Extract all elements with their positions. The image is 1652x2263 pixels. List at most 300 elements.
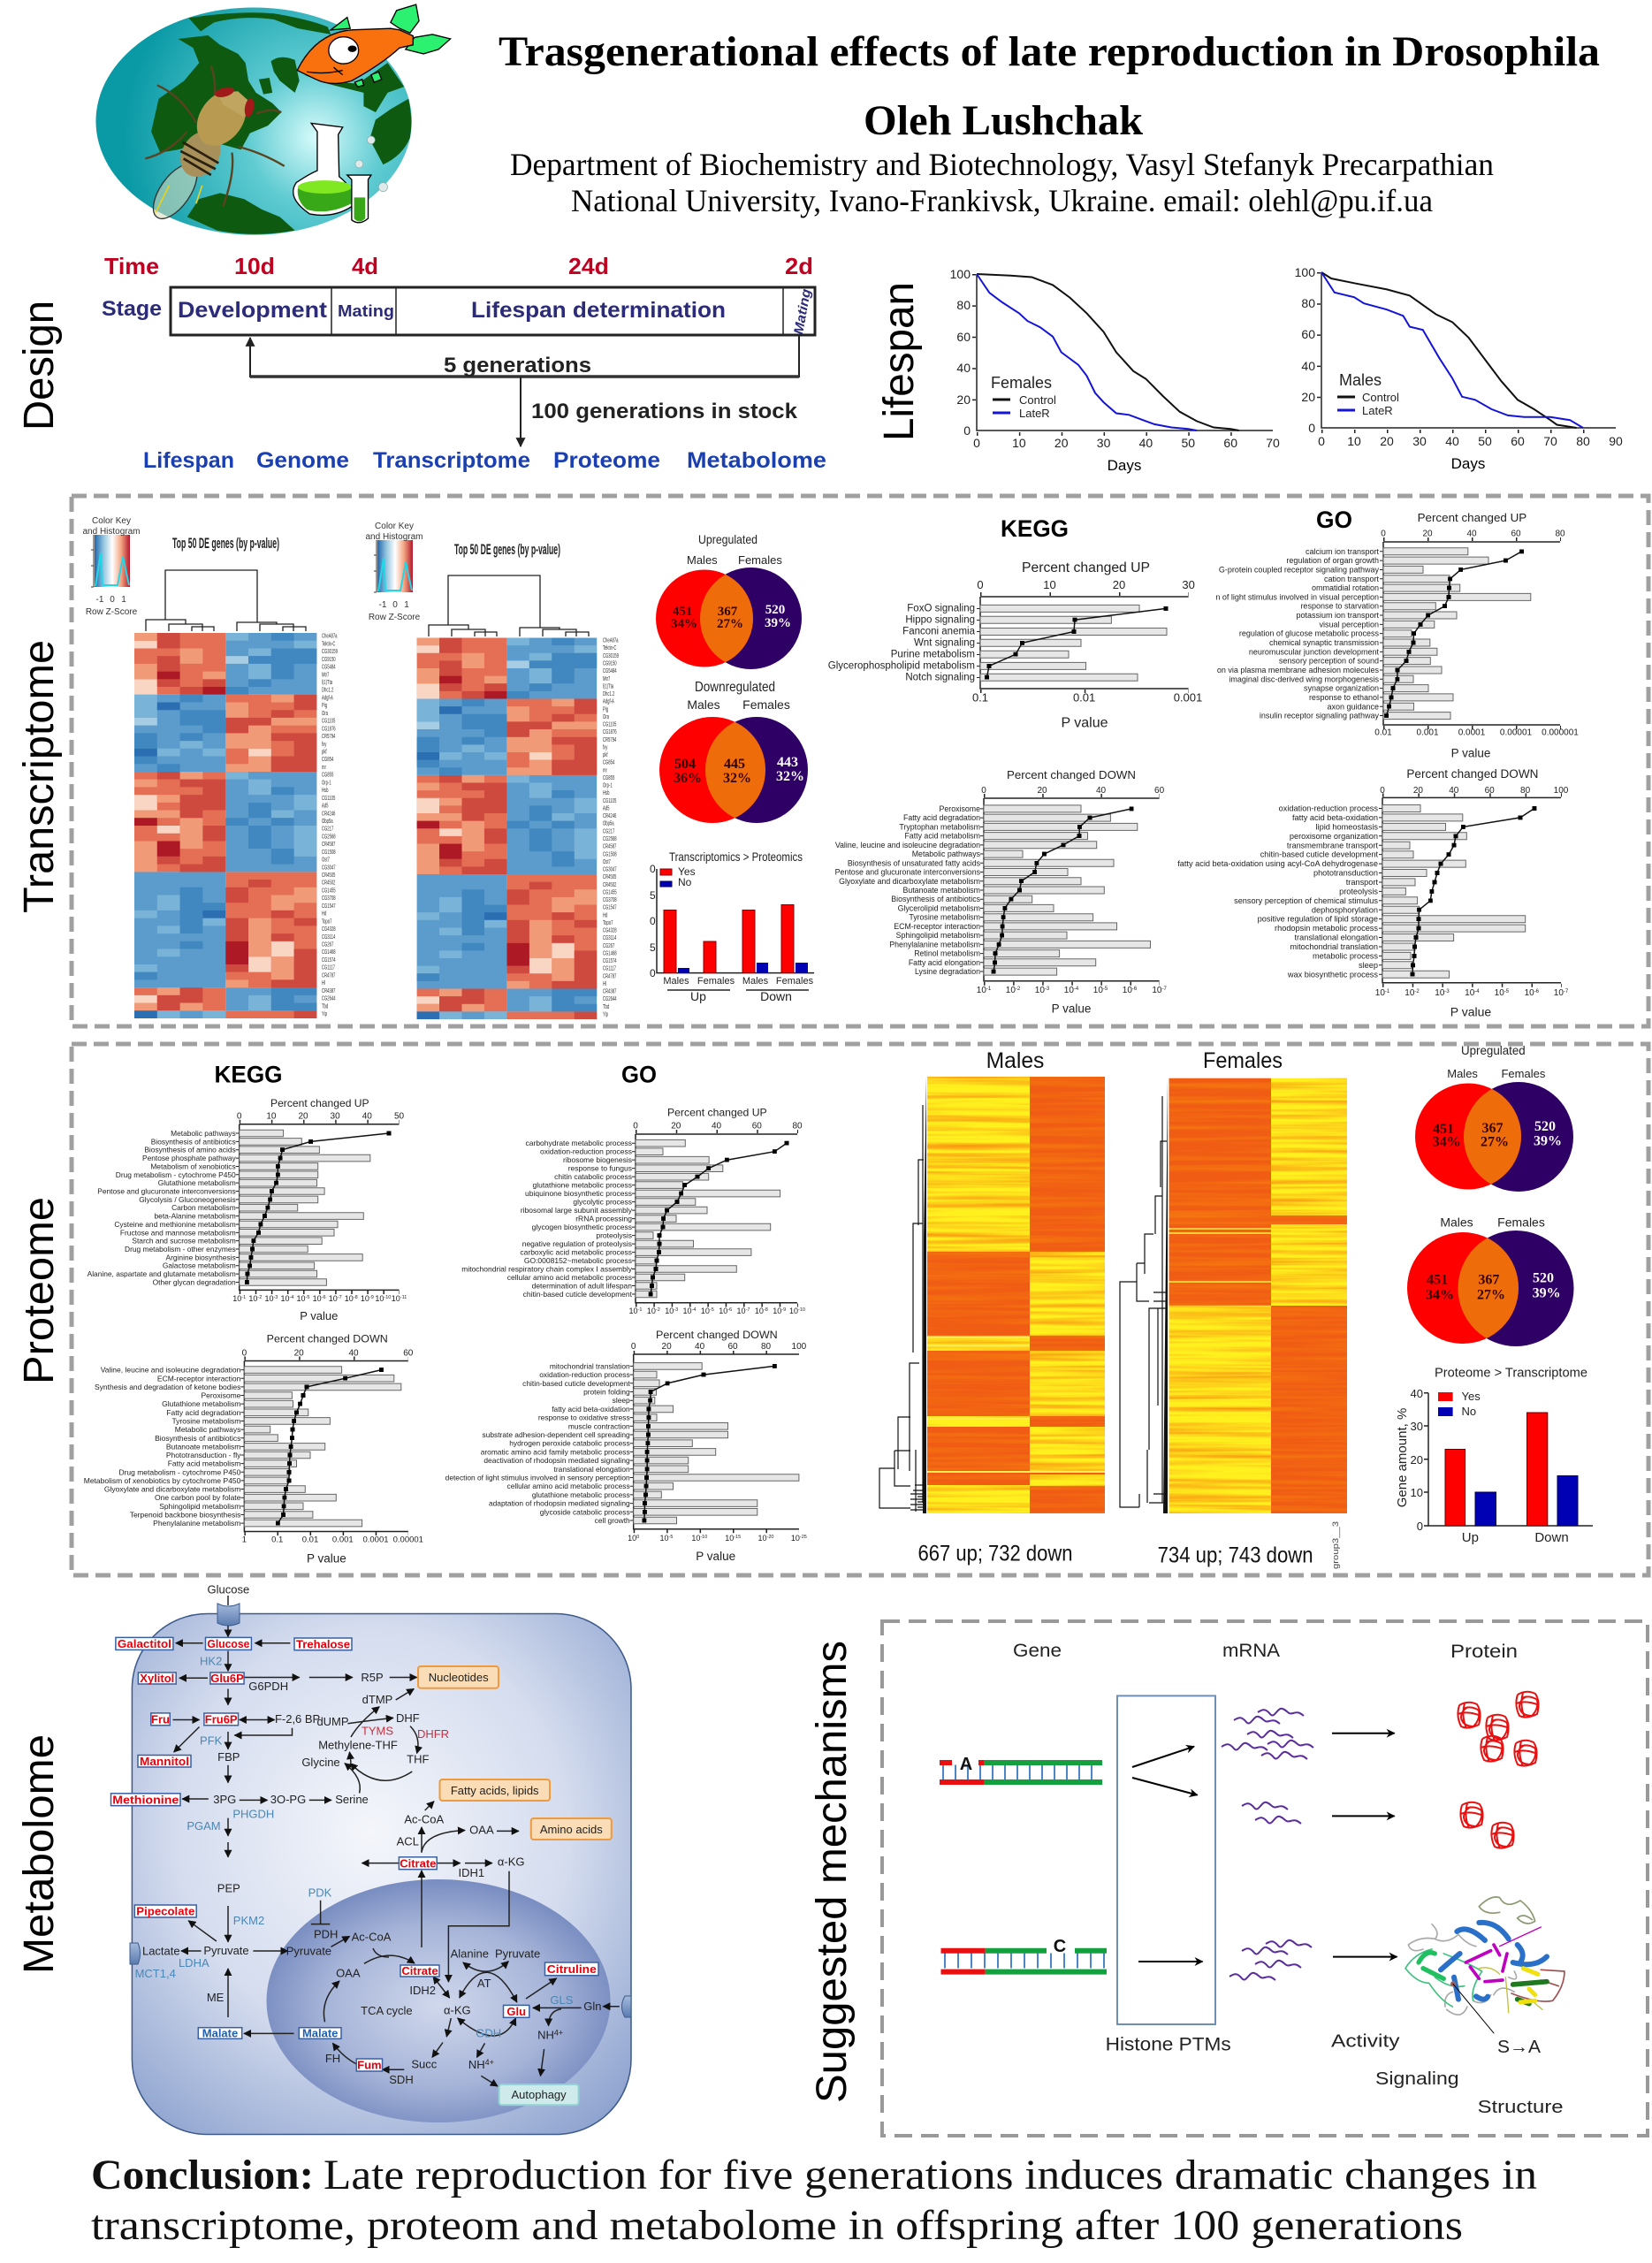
chart: transcriptome KEGG down: Retinol metabolism [914, 949, 980, 958]
gene labels: Hl [322, 980, 325, 987]
measured metabolite boxes: Xylitol [140, 1672, 174, 1685]
gene labels 2: Tbd [603, 1004, 609, 1010]
measured metabolite boxes: Citrate [400, 1856, 436, 1870]
chart: proteome GO down: 10 [691, 1534, 700, 1543]
gene labels: CG855 [322, 773, 333, 779]
chart: proteome KEGG down: 1 [242, 1535, 247, 1545]
chart: transcriptome KEGG down: Tyrosine metabolism [909, 913, 980, 922]
chart: lifespan females: 60 [1223, 436, 1237, 450]
bar chart: transcriptomics vs proteomics: 0 [650, 967, 656, 979]
icon: fruit fly [145, 65, 285, 225]
chart: proteome KEGG down: 0.1 [271, 1535, 283, 1545]
chart: transcriptome GO down: 0 [1380, 786, 1385, 796]
heading: GO (transcriptome): GO [1316, 507, 1352, 533]
bar chart: proteome vs transcriptome: 20 [1411, 1453, 1423, 1467]
chart: transcriptome KEGG up: 10 [1043, 578, 1056, 591]
gene labels: CG1117 [322, 965, 335, 971]
chart: transcriptome GO up: G-protein coupled receptor signaling pathway [1219, 565, 1379, 574]
chart: transcriptome KEGG down: Fatty acid degradation [903, 813, 980, 822]
chart: proteome KEGG up: -4 [289, 1295, 293, 1300]
chart: proteome GO up: -1 [638, 1307, 642, 1313]
chart: transcriptome GO up: 0.0001 [1458, 728, 1486, 738]
bar chart: proteome vs transcriptome: Gene amount, % [1395, 1408, 1410, 1507]
chart: proteome GO up: 10 [647, 1307, 656, 1315]
chart: proteome GO down: -10 [700, 1535, 707, 1540]
chart: transcriptome GO down: transmembrane transport [1287, 841, 1378, 850]
pathway text labels: Lactate [142, 1945, 180, 1957]
bar chart: transcriptomics vs proteomics: Transcriptomics > Proteomics [669, 850, 803, 864]
chart: proteome GO down: 80 [761, 1342, 771, 1352]
pathway text labels: α-KG [444, 2003, 471, 2017]
design timeline diagram [102, 253, 826, 473]
chart: proteome GO up: cellular amino acid metabolic process [507, 1273, 632, 1282]
gene labels 2: CR5794 [603, 737, 617, 743]
chart: proteome GO up: -6 [727, 1307, 732, 1313]
chart: transcriptome GO up: insulin receptor signaling pathway [1260, 712, 1379, 720]
gene labels: CR4387 [322, 988, 335, 994]
gene labels: Tektin-C [322, 642, 335, 648]
chart: proteome KEGG up: 40 [362, 1112, 372, 1122]
omics labels: Genome [256, 448, 349, 473]
chart: lifespan males: 0 [1308, 421, 1315, 435]
measured metabolite boxes: Mannitol [140, 1755, 189, 1768]
chart: transcriptome GO up: n of light stimulus involved in visual perception [1215, 592, 1379, 601]
chart: lifespan males: 60 [1301, 327, 1315, 341]
color key 2: Color Key [375, 522, 414, 531]
gene labels: Topo7 [322, 919, 331, 926]
venn: transcriptome upregulated: 39% [765, 616, 791, 630]
icon: flask and test tube [293, 123, 387, 223]
gene labels: CG5484 [322, 665, 336, 671]
heading: Metabolome: Metabolome [16, 1734, 63, 1974]
chart: proteome GO up: glutathione metabolic process [533, 1181, 632, 1190]
chart: transcriptome KEGG down: Pentose and glucuronate interconversions [835, 868, 981, 877]
chart: proteome KEGG down: Phototransduction - fly [166, 1451, 241, 1459]
bar chart: transcriptomics vs proteomics: No [678, 876, 692, 888]
color key 2: and Histogram [365, 532, 423, 542]
chart: proteome GO down: 0 [636, 1535, 639, 1540]
gene labels 2: CG1574 [603, 958, 617, 965]
gene labels: Hsb [322, 788, 328, 795]
gene labels 2: Orp-1 [603, 783, 613, 789]
measured metabolite boxes [111, 1637, 598, 2072]
chart: proteome KEGG up: Arginine biosynthesis [166, 1253, 236, 1261]
time row: 24d [568, 253, 609, 279]
pathway text labels: NH [468, 2058, 485, 2071]
chart: proteome KEGG up [88, 1097, 407, 1322]
chart: proteome GO up: glycolytic process [573, 1198, 632, 1207]
gene labels: Ad5 [322, 804, 328, 810]
chart: proteome KEGG up: P value [300, 1309, 338, 1322]
pathway text labels: Glycine [301, 1756, 340, 1769]
gene labels 2: CG1105 [603, 798, 616, 804]
gene labels 2: Mtr7 [603, 676, 610, 682]
chart: lifespan females: 60 [956, 330, 971, 344]
DNA with C variant: C [1054, 1937, 1066, 1956]
chart: transcriptome KEGG down: -5 [1103, 987, 1108, 992]
bar chart: transcriptomics vs proteomics [650, 850, 814, 1003]
enzyme labels: PKM2 [233, 1914, 264, 1927]
venn: transcriptome downregulated: 32% [723, 771, 751, 786]
chart: proteome GO up: -4 [692, 1307, 696, 1313]
chart: transcriptome GO up: on via plasma membrane adhesion molecules [1217, 666, 1379, 674]
measured metabolite boxes: Glucose [207, 1637, 249, 1650]
chart: transcriptome GO up: visual perception [1319, 620, 1379, 629]
measured metabolite boxes: Malate [302, 2026, 338, 2040]
venn: transcriptome downregulated: Males [687, 697, 720, 712]
gene labels: pkf [322, 750, 327, 756]
chart: proteome KEGG down: Glyoxylate and dicarboxylate metabolism [104, 1485, 240, 1494]
gene labels 2: CR4246 [603, 813, 616, 820]
chart: proteome KEGG up: Starch and sucrose metabolism [132, 1237, 236, 1246]
chart: lifespan males: 40 [1301, 359, 1315, 373]
chart: proteome GO down: -20 [767, 1535, 773, 1540]
pathway text labels: DHF [396, 1711, 420, 1725]
function labels [1331, 2031, 1564, 2117]
pathway text labels: dTMP [362, 1693, 392, 1706]
heading: Design: Design [16, 301, 63, 431]
gene labels: Yip [322, 1011, 327, 1017]
bar chart: proteome vs transcriptome [1395, 1365, 1593, 1545]
chart: lifespan males: Control [1362, 391, 1399, 404]
chart: proteome KEGG up: 10 [375, 1294, 384, 1303]
pathway text labels: IDH2 [409, 1984, 436, 1997]
chart: proteome KEGG up: 0 [237, 1112, 242, 1122]
heading: Transcriptome: Transcriptome [16, 640, 63, 913]
transcriptome heatmap 2: Top 50 DE genes (by p-value) [454, 541, 560, 558]
chart: transcriptome GO down [1177, 767, 1569, 1018]
chart: proteome GO down: -15 [734, 1535, 741, 1540]
chart: transcriptome KEGG down: -6 [1132, 987, 1138, 992]
venn: proteome upregulated: 27% [1481, 1135, 1509, 1150]
chart: transcriptome KEGG up: 0.01 [1073, 691, 1095, 704]
chart: proteome KEGG down: Tyrosine metabolism [171, 1416, 240, 1425]
chart: transcriptome GO down: -6 [1534, 989, 1540, 994]
chart: transcriptome KEGG down: 10 [1152, 986, 1161, 995]
chart: proteome GO up: carbohydrate metabolic process [526, 1139, 632, 1147]
chart: proteome GO down: 20 [662, 1342, 672, 1352]
chart: transcriptome GO up: 40 [1466, 530, 1477, 539]
gene labels 2: CG3708 [603, 897, 617, 903]
chart: proteome KEGG up: -11 [400, 1295, 407, 1300]
chart: transcriptome GO down: 10 [1554, 988, 1564, 998]
chart: transcriptome KEGG down: Percent changed DOWN [1007, 768, 1136, 781]
chart: transcriptome GO down: 10 [1435, 988, 1444, 998]
gene labels: CG217 [322, 827, 333, 833]
enzyme labels: GDH [476, 2026, 501, 2040]
chart: transcriptome KEGG down: 20 [1037, 786, 1047, 796]
chart: proteome GO up: chitin catabolic process [554, 1172, 632, 1181]
chart: proteome GO up: -3 [674, 1307, 678, 1313]
enzyme labels: GLS [550, 1993, 574, 2007]
transcriptome heatmap 1 [82, 516, 338, 1018]
chart: proteome KEGG up: 10 [280, 1294, 289, 1303]
chart: transcriptome KEGG down: Butanoate metabolism [902, 886, 980, 895]
gene labels 2: l(1)Tta [603, 684, 614, 690]
chart: transcriptome GO down: sensory perception of chemical stimulus [1234, 896, 1378, 905]
chart: transcriptome GO down: -1 [1385, 989, 1390, 994]
gene labels: Adgf-A [322, 696, 333, 702]
conclusion: Conclusion: [91, 2152, 314, 2198]
gene labels: CG3047 [322, 865, 336, 872]
chart: transcriptome GO down: -2 [1414, 989, 1420, 994]
chart: transcriptome KEGG down: Tryptophan metabolism [899, 822, 980, 831]
gene labels: CG9150 [322, 657, 336, 663]
chart: proteome GO up: 60 [752, 1121, 762, 1132]
chart: proteome KEGG up: 30 [331, 1112, 340, 1122]
chart: proteome KEGG down: Synthesis and degradation of ketone bodies [95, 1383, 240, 1391]
gene labels: CG2644 [322, 996, 336, 1002]
chart: proteome KEGG up: Metabolic pathways [171, 1129, 236, 1138]
gene labels: mr [322, 765, 326, 771]
chart: lifespan females: 50 [1182, 436, 1195, 450]
chart: proteome GO up: mitochondrial respiratory chain complex I assembly [461, 1265, 633, 1274]
arrow: 5 generations loop [250, 335, 799, 377]
measured metabolite boxes: Malate [202, 2026, 238, 2040]
mitochondrion [267, 1879, 610, 2122]
chart: proteome KEGG up: 10 [232, 1294, 241, 1303]
chart: proteome GO down: cellular amino acid metabolic process [507, 1482, 630, 1490]
venn: transcriptome upregulated: 34% [671, 617, 697, 631]
venn: transcriptome upregulated: Males [687, 553, 718, 567]
gene labels 2: CR4505 [603, 874, 616, 881]
pathway text labels: SDH [389, 2073, 414, 2086]
chart: proteome GO down: fatty acid beta-oxidation [552, 1405, 630, 1413]
panel: proteome [72, 1044, 1648, 1575]
gene labels: CG4328 [322, 926, 336, 933]
chart: lifespan males: 20 [1301, 390, 1315, 404]
chart: transcriptome GO up: 0.01 [1374, 728, 1392, 738]
column headers: Protein [1450, 1642, 1518, 1662]
gene labels: fxy [322, 742, 326, 748]
pathway text labels: FBP [217, 1750, 240, 1764]
chart: proteome KEGG down: Fatty acid degradation [166, 1408, 241, 1417]
dendrogram females [1120, 1096, 1168, 1507]
chart: proteome GO down: 0 [631, 1342, 636, 1352]
chart: lifespan males: 90 [1609, 434, 1623, 448]
chart: proteome GO up: 10 [701, 1307, 710, 1315]
chart: proteome GO down: response to oxidative stress [538, 1413, 630, 1422]
chart: transcriptome KEGG down: Fatty acid elongation [909, 958, 980, 967]
diagram: metabolome cell: Fatty acids, lipids [451, 1784, 539, 1797]
transcriptome heatmap 2 [365, 522, 619, 1019]
gene labels 2: CG5484 [603, 668, 617, 675]
chart: proteome GO down: substrate adhesion-dependent cell spreading [483, 1430, 630, 1439]
chart: transcriptome GO up: 60 [1511, 530, 1521, 539]
venn: transcriptome upregulated: 27% [717, 617, 743, 631]
color key 1: -1 [96, 595, 104, 605]
color key 1: and Histogram [82, 527, 141, 537]
chart: transcriptome KEGG up: 0 [977, 578, 984, 591]
bar chart: transcriptomics vs proteomics: 0 [650, 915, 656, 927]
chart: transcriptome KEGG down: 10 [1093, 986, 1103, 995]
chart: transcriptome GO up: 0.001 [1416, 728, 1439, 738]
chart: proteome GO down: hydrogen peroxide catabolic process [509, 1439, 630, 1448]
chart: proteome KEGG down: Butanoate metabolism [166, 1442, 240, 1451]
measured metabolite boxes: Fru6P [205, 1712, 238, 1726]
product boxes [418, 1666, 612, 2105]
chart: transcriptome KEGG up: Notch signaling [905, 672, 975, 682]
chart: transcriptome GO down: phototransduction [1313, 869, 1378, 878]
stage boxes: Lifespan determination [471, 298, 726, 323]
measured metabolite boxes: Galactitol [118, 1637, 171, 1650]
chart: transcriptome GO down: mitochondrial translation [1290, 942, 1378, 951]
chart: proteome GO up: 10 [755, 1307, 764, 1315]
gene labels: CG30159 [322, 649, 338, 656]
chart: proteome GO down: detection of light stimulus involved in sensory perception [445, 1473, 630, 1482]
chart: transcriptome GO down: 10 [1465, 988, 1474, 998]
chart: transcriptome KEGG down: 10 [977, 986, 986, 995]
enzyme labels [135, 1655, 574, 2040]
chart: proteome GO up: 10 [737, 1307, 746, 1315]
gene labels 2: CG1455 [603, 890, 617, 896]
gene labels 2: CG1876 [603, 729, 617, 736]
chart: lifespan females: 30 [1097, 436, 1111, 450]
measured metabolite boxes: Pipecolate [136, 1904, 194, 1918]
column headers: Gene [1013, 1641, 1062, 1661]
venn: transcriptome upregulated [656, 532, 802, 669]
chart: transcriptome KEGG down [835, 768, 1167, 1016]
gene labels 2: CG1105 [603, 722, 616, 728]
gene labels 2: CR4387 [603, 989, 616, 995]
chart: proteome KEGG up: -2 [257, 1295, 262, 1300]
gene labels: Orp-1 [322, 781, 331, 787]
chart: proteome GO down: 100 [792, 1342, 807, 1352]
function labels: Activity [1331, 2031, 1400, 2051]
chart: lifespan females: 40 [956, 361, 971, 375]
chart: proteome KEGG down: P value [307, 1552, 346, 1566]
gene labels: Ora [322, 711, 329, 717]
chart: proteome KEGG up: -6 [322, 1295, 326, 1300]
chart: transcriptome KEGG down: 10 [1123, 986, 1132, 995]
chart: proteome KEGG up: 20 [298, 1112, 308, 1122]
chart: transcriptome KEGG down: Sphingolipid metabolism [896, 931, 980, 940]
chart: proteome KEGG down: 0.00001 [393, 1535, 423, 1545]
pathway text labels: Ac-CoA [352, 1931, 392, 1943]
chart: proteome KEGG down: Sphingolipid metabolism [159, 1502, 240, 1511]
chart: transcriptome KEGG up: Percent changed UP [1022, 560, 1150, 575]
chart: proteome GO up: -7 [746, 1307, 750, 1313]
cell body [132, 1614, 631, 2134]
gene labels 2: Ad5 [603, 806, 609, 812]
chart: proteome GO down: sleep [613, 1396, 630, 1405]
chart: proteome GO up: 20 [671, 1121, 681, 1132]
color key 1: Row Z-Score [86, 607, 138, 617]
bar chart: proteome vs transcriptome: 0 [1417, 1520, 1423, 1533]
chart: transcriptome KEGG down: Fatty acid metabolism [904, 832, 980, 841]
bar chart: proteome vs transcriptome: Yes [1462, 1390, 1481, 1403]
venn: proteome downregulated: 520 [1533, 1270, 1554, 1285]
chart: proteome GO up: glycogen biosynthetic process [532, 1223, 632, 1231]
omics labels: Proteome [553, 448, 660, 473]
histone PTMs box [1106, 1695, 1231, 2054]
heading: GO (proteome): GO [621, 1062, 657, 1088]
bar chart: transcriptomics vs proteomics: Females [697, 976, 735, 987]
chart: proteome KEGG down: Drug metabolism - cytochrome P450 [118, 1467, 241, 1476]
column headers [1013, 1641, 1518, 1662]
venn: proteome downregulated [1407, 1215, 1573, 1346]
chart: lifespan males: 70 [1543, 434, 1557, 448]
gene labels 2: CG217 [603, 829, 614, 835]
chart: transcriptome GO down: Percent changed DOWN [1406, 767, 1538, 781]
chart: proteome GO up: GO:0008152~metabolic process [524, 1256, 632, 1265]
chart: proteome KEGG up: Fructose and mannose metabolism [120, 1228, 236, 1237]
measured metabolite boxes: Fum [357, 2058, 382, 2072]
gene labels 2: Obp5a [603, 821, 614, 827]
venn: proteome upregulated: 367 [1481, 1121, 1503, 1136]
chart: lifespan females: 0 [963, 423, 971, 438]
chart: proteome KEGG up: -3 [273, 1295, 278, 1300]
chart: transcriptome KEGG down: Glycerolipid metabolism [898, 903, 980, 912]
heatmap: proteome females: 734 up; 743 down [1158, 1543, 1313, 1568]
chart: lifespan females: Control [1019, 393, 1056, 407]
chart: transcriptome KEGG down: Valine, leucine and isoleucine degradation [835, 841, 980, 850]
color key 2: 0 [392, 600, 398, 610]
chart: transcriptome GO up: Percent changed UP [1418, 511, 1526, 524]
gene labels 2: Dhc1.2 [603, 691, 614, 697]
gene labels: CR4505 [322, 872, 335, 879]
gene labels: CG3708 [322, 895, 336, 903]
gene labels 2: Hsb [603, 790, 609, 797]
pathway text labels: AT [477, 1977, 491, 1990]
chart: lifespan males: 60 [1511, 434, 1525, 448]
pathway text labels: NH [537, 2028, 554, 2042]
chart: transcriptome GO down: -7 [1564, 989, 1569, 994]
gene labels: Tbd [322, 1003, 328, 1010]
measured metabolite boxes: Trehalose [296, 1637, 350, 1650]
dendrogram males [879, 1105, 925, 1512]
chart: proteome KEGG up: 10 [392, 1294, 400, 1303]
enzyme labels: PFK [200, 1734, 223, 1747]
chart: proteome GO up: response to fungus [568, 1164, 632, 1173]
venn: transcriptome downregulated: 32% [776, 769, 804, 784]
chart: proteome KEGG down: Metabolism of xenobiotics by cytochrome P450 [84, 1476, 241, 1485]
venn: proteome downregulated: 27% [1477, 1287, 1505, 1303]
chart: proteome KEGG up: 10 [345, 1294, 354, 1303]
chart: transcriptome GO down: sleep [1359, 961, 1378, 970]
gene labels: CG267 [322, 942, 333, 949]
gene labels: CG2568 [322, 834, 336, 841]
bar chart: transcriptomics vs proteomics: 0 [650, 863, 656, 875]
DNA with A variant [940, 1755, 1102, 1782]
gene labels 2: CR4587 [603, 844, 616, 850]
venn: proteome downregulated: 451 [1427, 1272, 1448, 1287]
chart: proteome KEGG up: Cysteine and methionine metabolism [114, 1220, 236, 1229]
pathway text labels: dUMP [316, 1715, 349, 1728]
chart: proteome KEGG down: Biosynthesis of antibiotics [155, 1434, 240, 1443]
chart: proteome KEGG down: Glutathione metabolism [162, 1399, 240, 1408]
gene labels 2: CG30159 [603, 653, 619, 659]
chart: proteome GO up: 10 [789, 1307, 798, 1315]
pathway text labels: Glucose [208, 1582, 249, 1596]
gene labels 2: CG9150 [603, 661, 617, 667]
conclusion: Late reproduction for five generations induces dramatic changes in [324, 2152, 1537, 2198]
gene labels: CR4502 [322, 880, 335, 887]
chart: transcriptome GO down: 10 [1405, 988, 1414, 998]
bar chart: transcriptomics vs proteomics: Down [760, 989, 792, 1003]
gene labels: Hd [322, 911, 326, 918]
chart: proteome KEGG up: Galactose metabolism [163, 1261, 236, 1270]
chart: transcriptome GO up: imaginal disc-derived wing morphogenesis [1229, 674, 1379, 683]
heatmap: proteome females: group3__3 [1331, 1521, 1340, 1569]
gene labels: CG1105 [322, 719, 335, 725]
gene labels 2: CG267 [603, 943, 614, 949]
column headers: mRNA [1222, 1641, 1280, 1661]
omics labels: Transcriptome [373, 448, 530, 473]
chart: transcriptome KEGG down: -1 [986, 987, 992, 992]
color key 2: 1 [404, 600, 409, 610]
chart: transcriptome KEGG down: Peroxisome [940, 804, 980, 813]
